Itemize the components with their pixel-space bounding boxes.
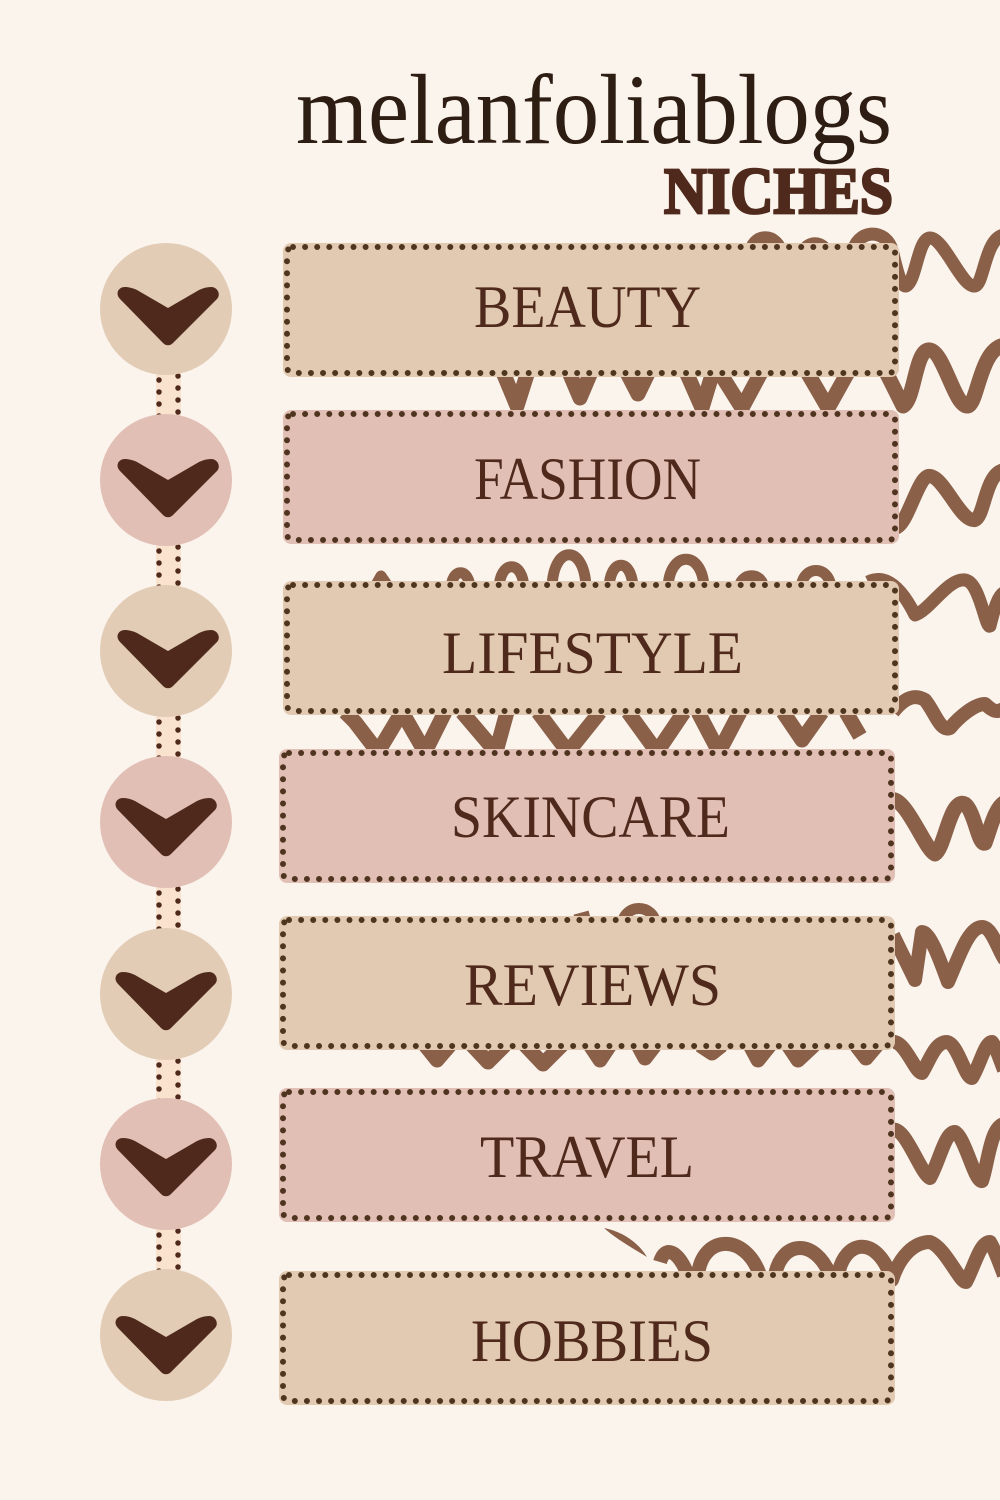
step 6: travel — [100, 1088, 895, 1230]
circle icon: chevron — [100, 243, 232, 375]
step 7: hobbies — [100, 1269, 895, 1405]
label box: travel: TRAVEL — [480, 1124, 694, 1190]
label box: travel — [279, 1088, 895, 1222]
circle icon: chevron — [100, 1098, 232, 1230]
label box: reviews — [279, 916, 895, 1050]
connector strips — [156, 370, 181, 1275]
brown scribble decoration — [345, 234, 1000, 1282]
title: melanfoliablogs — [296, 54, 892, 165]
label box: beauty: BEAUTY — [474, 274, 701, 340]
circle icon: chevron — [100, 928, 232, 1060]
label box: hobbies: HOBBIES — [471, 1308, 713, 1374]
label box: fashion: FASHION — [474, 446, 701, 512]
label box: skincare: SKINCARE — [451, 784, 730, 850]
label box: skincare — [279, 749, 895, 883]
step 1: beauty — [100, 243, 899, 377]
circle icon: chevron — [100, 1269, 232, 1401]
step 5: reviews — [100, 916, 895, 1060]
label box: lifestyle — [283, 581, 899, 715]
step 3: lifestyle — [100, 581, 899, 717]
circle icon: chevron — [100, 414, 232, 546]
step 2: fashion — [100, 410, 899, 546]
label box: lifestyle: LIFESTYLE — [442, 620, 743, 686]
label box: fashion — [283, 410, 899, 544]
step 4: skincare — [100, 749, 895, 888]
circle icon: chevron — [100, 756, 232, 888]
label box: hobbies — [279, 1271, 895, 1405]
heading: niches: NICHES — [664, 154, 893, 228]
circle icon: chevron — [100, 585, 232, 717]
label box: beauty — [283, 243, 899, 377]
label box: reviews: REVIEWS — [464, 952, 721, 1018]
